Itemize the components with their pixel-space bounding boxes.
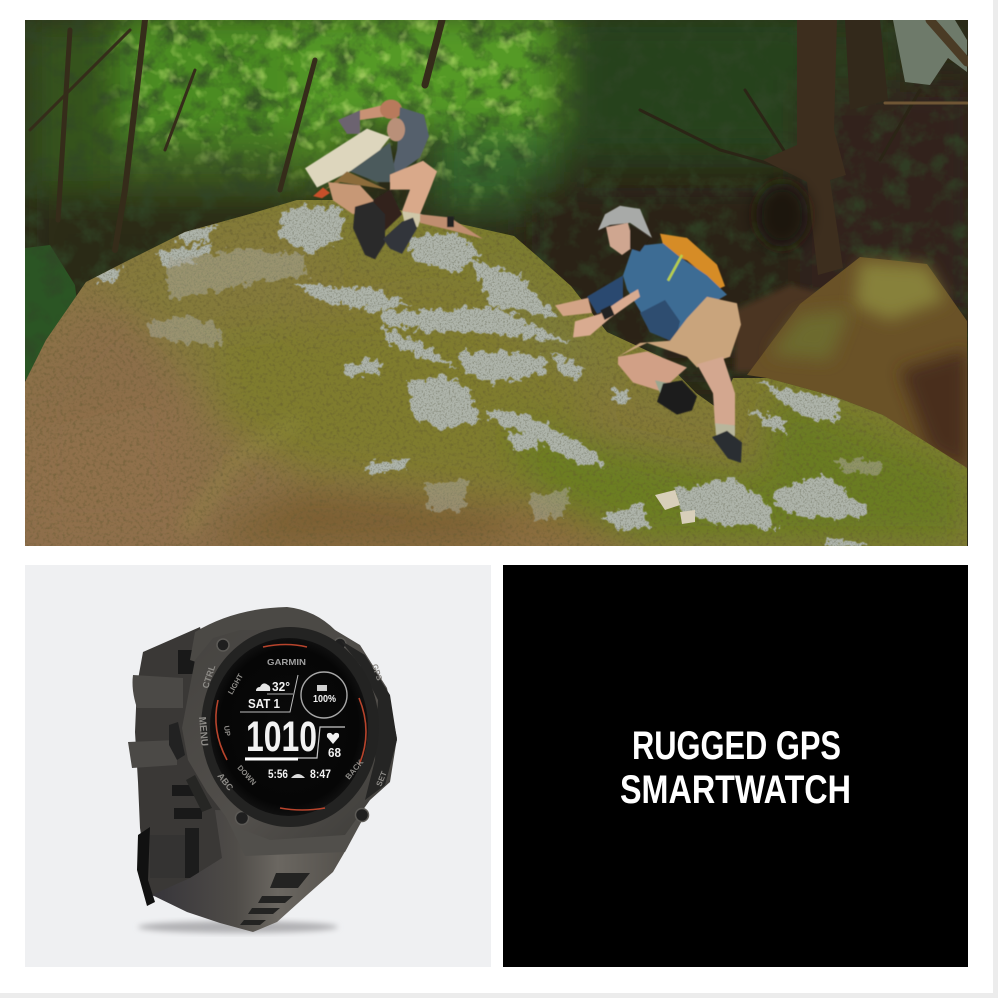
leg skin	[328, 182, 377, 214]
rear strap	[135, 627, 240, 905]
top	[350, 142, 397, 182]
climbing hiker	[555, 206, 742, 463]
sleeve	[587, 275, 623, 314]
tree trunks	[30, 20, 967, 250]
resting arm	[420, 214, 483, 239]
lichen patches	[92, 205, 866, 546]
dark cave opening	[756, 183, 808, 247]
inner black bezel	[201, 627, 379, 827]
black right bezel	[340, 640, 397, 800]
straight leg	[697, 357, 735, 425]
face	[606, 223, 634, 255]
red bezel markers	[216, 644, 366, 810]
sleeve	[338, 110, 360, 134]
far arm	[555, 298, 592, 316]
screen	[210, 638, 368, 816]
watch display readouts: 68	[328, 746, 341, 760]
jacket shadow	[640, 300, 680, 343]
bent leg	[618, 351, 687, 391]
strap loops	[132, 675, 183, 708]
bezel case	[182, 630, 397, 840]
seated hiker	[305, 100, 483, 259]
lower strap vents	[240, 873, 310, 925]
boot	[657, 380, 697, 415]
display rules and gauges	[240, 672, 347, 759]
raised leg	[390, 161, 437, 214]
forearm	[359, 105, 384, 121]
face	[387, 118, 405, 141]
sock	[715, 423, 735, 436]
red fabric	[313, 187, 330, 198]
watch shadow	[138, 921, 338, 933]
battery icon	[317, 685, 327, 691]
heading text: RUGGED GPS	[632, 724, 841, 768]
case screws	[217, 638, 368, 824]
watch bezel labels: UP	[222, 725, 232, 737]
skirt	[325, 171, 387, 190]
moss texture	[25, 190, 968, 550]
sunrise icon	[291, 774, 305, 778]
watch display readouts: 5:56	[268, 767, 288, 781]
moss and bare stone colouring	[25, 210, 967, 546]
watch bezel labels: BACK	[344, 758, 366, 781]
white jacket	[305, 129, 390, 187]
panel: product image	[25, 565, 491, 967]
watch display readouts: 8:47	[310, 767, 331, 781]
sock	[655, 380, 670, 393]
watch display readouts: SAT 1	[248, 696, 280, 711]
shorts	[618, 297, 741, 367]
panel: headline	[503, 565, 968, 967]
watch display readouts	[246, 679, 341, 781]
wristwatch	[600, 305, 615, 320]
backpack	[660, 234, 725, 288]
heading text: SMARTWATCH	[620, 768, 851, 812]
watch bezel labels: MENU	[196, 716, 210, 747]
side buttons	[169, 722, 185, 760]
watch bezel labels: DOWN	[236, 763, 258, 787]
watch bezel labels	[196, 663, 389, 793]
distant bright trunks top right	[893, 20, 967, 85]
hair	[393, 106, 430, 173]
watch display readouts: 32°	[272, 679, 290, 694]
forest background	[25, 10, 980, 546]
watch bezel labels: LIGHT	[226, 672, 245, 696]
inner strap slots	[172, 650, 202, 819]
left green bush	[25, 245, 78, 380]
photo panel: hikers on a mossy boulder	[25, 10, 980, 550]
watch bezel labels: CTRL	[200, 663, 217, 690]
boot	[712, 431, 742, 463]
moss fringe highlight	[185, 420, 300, 530]
jacket	[622, 242, 728, 330]
brand name: GARMIN	[267, 657, 306, 667]
hat	[598, 206, 652, 238]
watch bezel labels: GPS	[370, 663, 384, 682]
weather icon	[256, 683, 270, 691]
wristwatch	[447, 216, 454, 227]
top strap lug	[190, 607, 350, 670]
faint lichen patches	[147, 250, 880, 520]
main boulder	[25, 190, 968, 550]
watch bezel labels: SET	[375, 770, 389, 788]
buckle and keeper	[137, 827, 155, 906]
right boulder	[747, 257, 967, 470]
boots	[353, 201, 385, 259]
dark shorts	[373, 190, 402, 232]
forearm and hand	[573, 289, 640, 337]
hair	[630, 225, 650, 252]
heading text	[620, 724, 851, 812]
sock	[402, 211, 422, 227]
watch display readouts: 1010	[246, 713, 317, 761]
main right tree trunk	[763, 20, 846, 275]
foliage mottling	[25, 20, 968, 390]
watch display readouts: 100%	[313, 694, 336, 705]
pale stone flecks	[655, 490, 695, 524]
lower strap	[152, 810, 362, 932]
jacket strap	[668, 255, 682, 281]
watch bezel labels: ABC	[215, 771, 236, 793]
heart icon	[327, 733, 339, 744]
hand	[380, 100, 402, 119]
lug connector	[225, 815, 365, 856]
